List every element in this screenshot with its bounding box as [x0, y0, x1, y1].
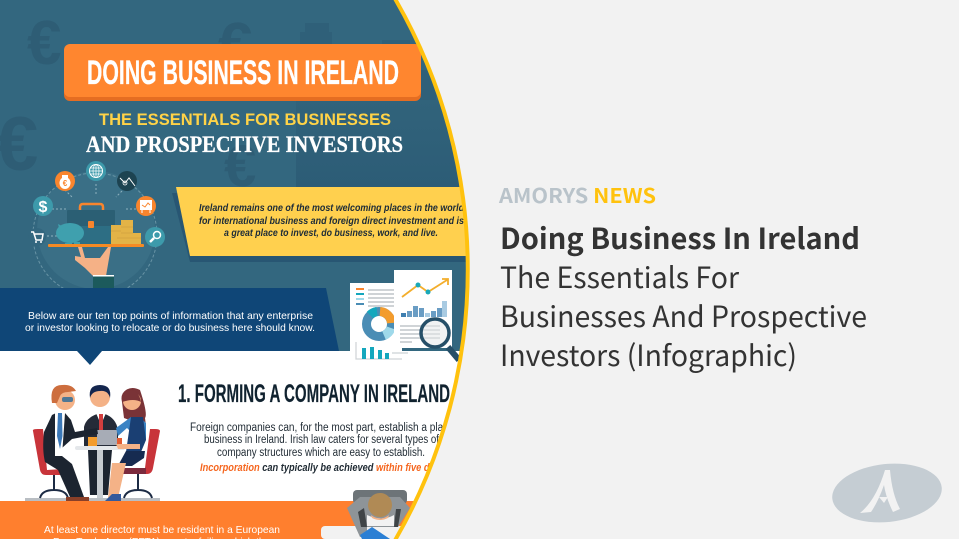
background euro symbols [0, 20, 255, 186]
yellow intro panel: a great place to invest, do business, work, and live. [224, 227, 438, 239]
illustration: desk and person from above [321, 490, 410, 539]
orange section text [44, 526, 280, 539]
body text: Foreign companies can, for the most part, establish a place of [190, 422, 466, 434]
emphasis line: Incorporation can typically be achieved within five days [200, 462, 445, 474]
title banner [64, 44, 421, 101]
icon: euro bag: € [63, 179, 68, 188]
yellow intro panel: Ireland remains one of the most welcoming places in the world [199, 202, 464, 214]
news label: AMORYS NEWS [498, 180, 656, 209]
icon: dollar: $ [39, 199, 48, 216]
magnifier [421, 319, 459, 360]
yellow intro panel [172, 187, 480, 262]
icon: magnifier [145, 227, 165, 247]
headline: Doing Business In Ireland [500, 216, 860, 258]
headline: The Essentials For [500, 255, 740, 297]
table [75, 430, 125, 498]
middle man [84, 385, 118, 495]
icon: cart [31, 228, 46, 245]
chairs [33, 429, 160, 475]
icon: globe [86, 161, 106, 181]
blue callout banner [0, 288, 339, 365]
tray [48, 244, 144, 247]
left man [43, 385, 98, 501]
illustration: hand with tray and briefcase [28, 161, 165, 297]
orange section [0, 501, 414, 539]
headline: Investors (Infographic) [500, 333, 797, 375]
icon: presentation [136, 196, 156, 216]
body text [190, 422, 466, 459]
donut chart [366, 312, 392, 336]
white section [0, 351, 480, 501]
briefcase [67, 204, 115, 244]
headline: Businesses And Prospective [500, 294, 867, 336]
background euro symbols: € [27, 9, 61, 78]
right woman [105, 388, 146, 501]
icon: chart [117, 171, 137, 191]
coins [111, 220, 141, 244]
body text: company structures which are easy to establish. [217, 447, 425, 459]
piggy bank [56, 223, 84, 244]
blue callout banner: or investor looking to relocate or do business here should know. [25, 322, 315, 334]
small bar chart [362, 347, 389, 359]
illustration: report documents [350, 270, 459, 360]
body text: business in Ireland. Irish law caters for several types of [204, 434, 440, 446]
orange section text: At least one director must be resident in a European [44, 524, 280, 536]
headline [500, 216, 867, 375]
logo [829, 458, 945, 528]
subtitle line 2: AND PROSPECTIVE INVESTORS [86, 132, 403, 158]
panel: infographic preview [0, 0, 480, 539]
sleeve [93, 275, 114, 288]
subtitle line 1: THE ESSENTIALS FOR BUSINESSES [99, 111, 391, 129]
background euro symbols: € [218, 11, 252, 80]
yellow curved border [394, 0, 470, 539]
blue callout banner: Below are our ten top points of information that any enterprise [28, 310, 313, 322]
hand [75, 247, 111, 276]
background skyline [296, 153, 459, 187]
background euro symbols: € [224, 134, 256, 199]
illustration: business meeting [25, 385, 160, 501]
heading: forming a company: 1. FORMING A COMPANY IN IRELAND [178, 380, 450, 408]
title banner: DOING BUSINESS IN IRELAND [87, 54, 399, 92]
yellow intro panel: for international business and foreign direct investment and is [199, 215, 464, 227]
